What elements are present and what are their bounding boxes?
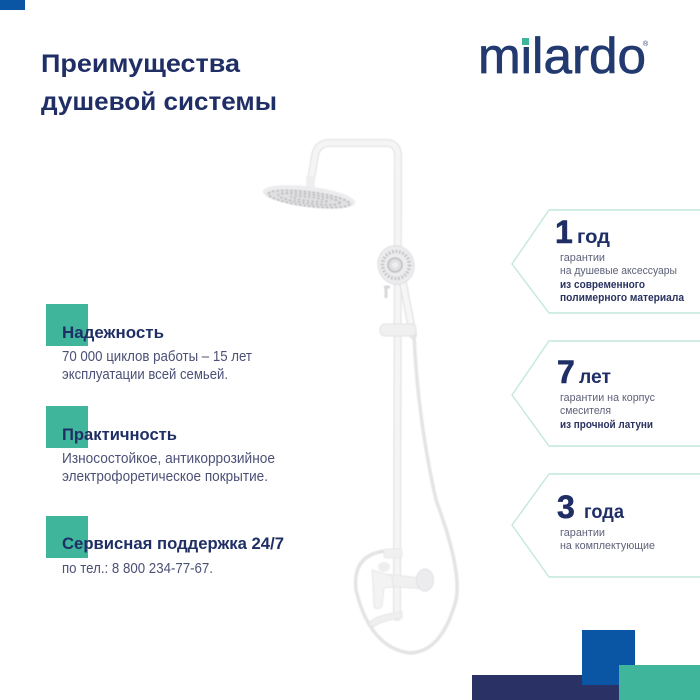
warranty panel: 7 years: лет (579, 367, 611, 388)
benefit: reliability: Надежность (62, 323, 164, 342)
benefit: service support: Сервисная поддержка 24/7 (62, 534, 284, 553)
warranty panel: 1 year (512, 210, 700, 313)
title (41, 50, 277, 116)
warranty panel: 7 years: смесителя (560, 405, 611, 417)
hose connector (384, 549, 402, 558)
warranty panel: 3 years (512, 474, 700, 577)
warranty panel: 1 year: на душевые аксессуары (560, 265, 677, 277)
corner accent: bottom right blocks (472, 630, 700, 700)
title: душевой системы (41, 88, 277, 116)
warranty panel: 7 years: 7 (557, 354, 575, 390)
mixer knob (378, 562, 390, 572)
logo: milardo: ® (643, 40, 649, 48)
benefit: reliability: 70 000 циклов работы – 15 лет (62, 348, 252, 365)
sliding bracket (380, 324, 416, 336)
logo: milardo: milardo (478, 28, 646, 84)
rain shower head (262, 176, 356, 213)
benefit: service support: по тел.: 8 800 234-77-67. (62, 560, 213, 577)
wall flange (416, 569, 434, 591)
spout (368, 612, 402, 627)
warranty panel: 7 years: из прочной латуни (560, 419, 653, 431)
benefit: practicality: электрофоретическое покрытие. (62, 468, 268, 485)
hand shower head (373, 241, 419, 289)
hose (356, 336, 457, 653)
benefit: practicality (46, 406, 275, 485)
corner accent: top left (0, 0, 25, 10)
benefit: reliability: эксплуатации всей семьей. (62, 366, 228, 383)
mixer body (385, 574, 423, 589)
hand shower handle (402, 278, 413, 335)
warranty panel: 7 years (512, 341, 700, 446)
benefit: reliability (46, 304, 252, 383)
title: Преимущества (41, 50, 241, 78)
warranty panel: 1 year: 1 (555, 214, 573, 250)
warranty panel: 3 years: на комплектующие (560, 540, 655, 552)
lever handle (372, 570, 393, 609)
warranty panel: 1 year: полимерного материала (560, 292, 685, 304)
diverter knob (384, 286, 390, 298)
warranty panel: 1 year: гарантии (560, 252, 605, 264)
shower system illustration (262, 143, 457, 653)
benefit: service support (46, 516, 284, 577)
warranty panel: 1 year: из современного (560, 279, 645, 291)
overhead arm and rail (310, 143, 398, 617)
warranty panel: 1 year: год (577, 227, 610, 248)
warranty panel: 7 years: гарантии на корпус (560, 392, 655, 404)
warranty panel: 3 years: гарантии (560, 527, 605, 539)
benefit: practicality: Практичность (62, 425, 177, 444)
warranty panel: 3 years: 3 (557, 489, 575, 525)
benefit: practicality: Износостойкое, антикоррозийное (62, 450, 275, 467)
warranty panel: 3 years: года (584, 502, 624, 523)
